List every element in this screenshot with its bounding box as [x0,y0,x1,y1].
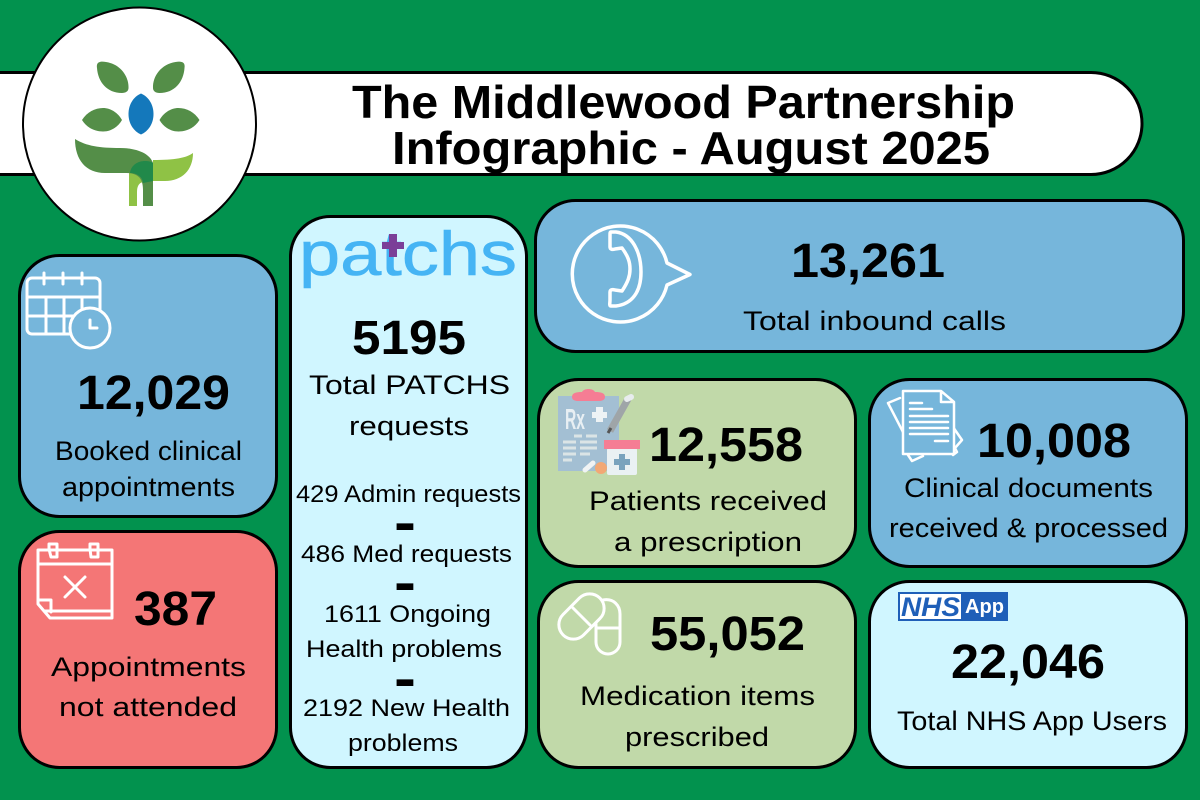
label: total PATCHS requests: Total PATCHS [309,370,510,400]
label: patients received a prescription: a prescription [614,527,802,557]
statistic: 13,261: 13,261 [791,235,945,288]
panel: clinical documents [870,380,1186,566]
panel: NHS App users [870,582,1186,768]
title: Infographic - August 2025 [392,122,990,174]
breakdown list: Health problems [306,636,502,663]
icon: calendar with clock [27,273,110,348]
NHS App logo [898,592,1008,622]
statistic: 10,008: 10,008 [977,415,1131,468]
breakdown list: 1611 Ongoing [324,601,491,628]
panel: medication items prescribed [538,582,856,768]
panel: appointments not attended [20,532,276,768]
icon: documents [888,391,962,461]
label: clinical documents received and processed: received & processed [889,513,1168,543]
label: booked clinical appointments [55,436,242,502]
label: medication items prescribed: Medication items [580,681,815,711]
breakdown list: problems [348,730,458,757]
label: patients received a prescription: Patients received [589,486,827,516]
panel: PATCHS requests [290,216,526,768]
label: total PATCHS requests: requests [349,411,469,441]
label: appointments not attended: Appointments [51,652,246,682]
panel: patients received a prescription [538,380,856,566]
panel: total inbound calls [536,200,1184,352]
statistic: 5195: 5195 [352,312,466,365]
icon: capsules [553,588,620,654]
label: booked clinical appointments: appointments [62,472,235,502]
icon: prescription [558,389,640,475]
label: total NHS App users: Total NHS App Users [897,706,1167,736]
title banner [0,72,1142,174]
PATCHS logo: patchs [299,220,517,289]
label: total PATCHS requests [309,370,510,441]
title [352,76,1015,174]
icon: phone speech bubble [572,226,690,322]
NHS App logo: App [965,596,1004,618]
label: medication items prescribed [580,681,815,752]
label: total inbound calls: Total inbound calls [743,306,1006,336]
logo [23,8,256,240]
title: The Middlewood Partnership [352,76,1015,128]
breakdown list: 429 Admin requests [296,481,521,508]
breakdown list: - [394,550,416,613]
statistic: 22,046: 22,046 [951,636,1105,689]
NHS App logo: NHS [901,592,960,622]
icon: missed calendar [38,544,112,618]
label: appointments not attended: not attended [59,692,237,722]
breakdown list: 2192 New Health [303,695,510,722]
statistic: 55,052: 55,052 [650,608,805,661]
breakdown list [296,481,521,757]
label: patients received a prescription [589,486,827,557]
breakdown list: - [394,490,416,553]
breakdown list: - [394,646,416,709]
statistic: 12,029: 12,029 [77,367,230,420]
statistic: 387: 387 [134,583,217,636]
label: clinical documents received and processed [889,473,1168,543]
statistic: 12,558: 12,558 [649,419,803,472]
label: booked clinical appointments: Booked clinical [55,436,242,466]
panel: booked clinical appointments [20,256,276,516]
breakdown list: 486 Med requests [301,541,512,568]
label: medication items prescribed: prescribed [625,722,769,752]
label: clinical documents received and processed: Clinical documents [904,473,1153,503]
label: appointments not attended [51,652,246,722]
icon: prescription: Rx [565,404,585,436]
